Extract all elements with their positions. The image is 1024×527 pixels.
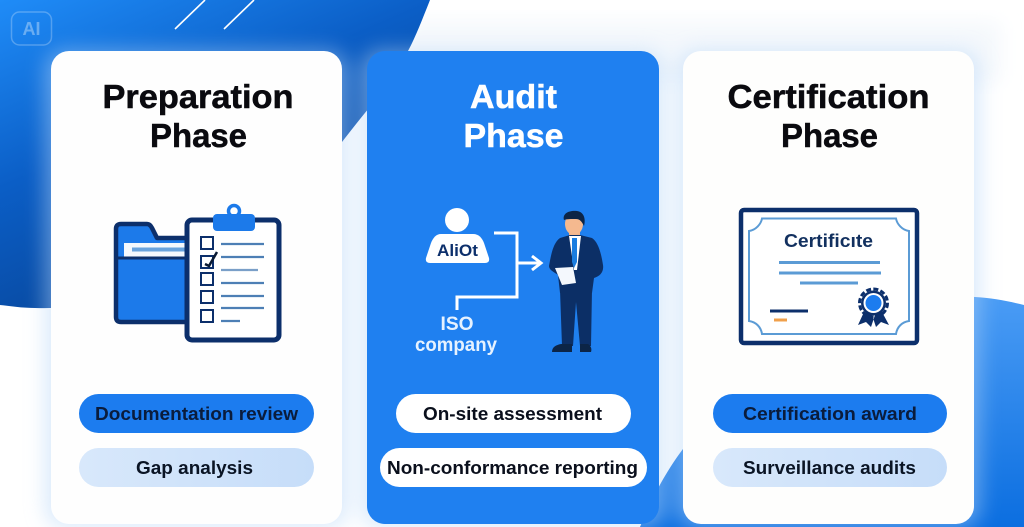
blue shape: bottom right — [640, 296, 1024, 527]
connector arrow — [457, 233, 541, 310]
card background — [367, 51, 659, 524]
pill: documentation review: Documentation review — [95, 404, 299, 424]
panel: preparation phase — [51, 51, 342, 524]
icon: auditor badge — [426, 208, 489, 263]
icon: folder and checklist clipboard — [116, 206, 279, 340]
pill: documentation review — [79, 394, 314, 433]
label: ISO company: company — [415, 335, 497, 356]
icon: certificate: Certificıte — [784, 230, 873, 251]
pill: gap analysis: Gap analysis — [136, 458, 253, 478]
label: ISO company — [415, 314, 497, 356]
pill: non-conformance reporting — [380, 448, 647, 487]
blue shape: top left — [0, 0, 430, 308]
icon: standing businessman — [549, 211, 603, 352]
pill: gap analysis — [79, 448, 314, 487]
heading: audit phase: Audit — [470, 78, 557, 115]
heading: audit phase: Phase — [464, 117, 564, 154]
panel: audit phase — [367, 51, 659, 524]
pill: on-site assessment — [396, 394, 631, 433]
panel: certification phase — [683, 51, 974, 524]
pill: certification award: Certification award — [743, 404, 917, 424]
heading: preparation phase: Preparation — [102, 78, 294, 115]
icon: auditor badge: AliOt — [437, 241, 478, 260]
card background — [683, 51, 974, 524]
AI badge — [12, 12, 52, 45]
decorative diagonal lines — [175, 0, 254, 29]
heading: preparation phase — [102, 78, 294, 154]
pill: surveillance audits — [713, 448, 947, 487]
card background — [51, 51, 342, 524]
AI badge: AI — [22, 19, 40, 39]
pill: on-site assessment: On-site assessment — [423, 404, 602, 424]
heading: audit phase — [464, 78, 564, 154]
pill: non-conformance reporting: Non-conformance reporting — [387, 458, 638, 478]
heading: certification phase — [728, 78, 930, 154]
heading: preparation phase: Phase — [150, 117, 247, 154]
heading: certification phase: Phase — [781, 117, 878, 154]
pill: surveillance audits: Surveillance audits — [743, 458, 916, 478]
icon: certificate — [741, 210, 917, 343]
pill: certification award — [713, 394, 947, 433]
heading: certification phase: Certification — [728, 78, 930, 115]
label: ISO company: ISO — [440, 314, 474, 335]
